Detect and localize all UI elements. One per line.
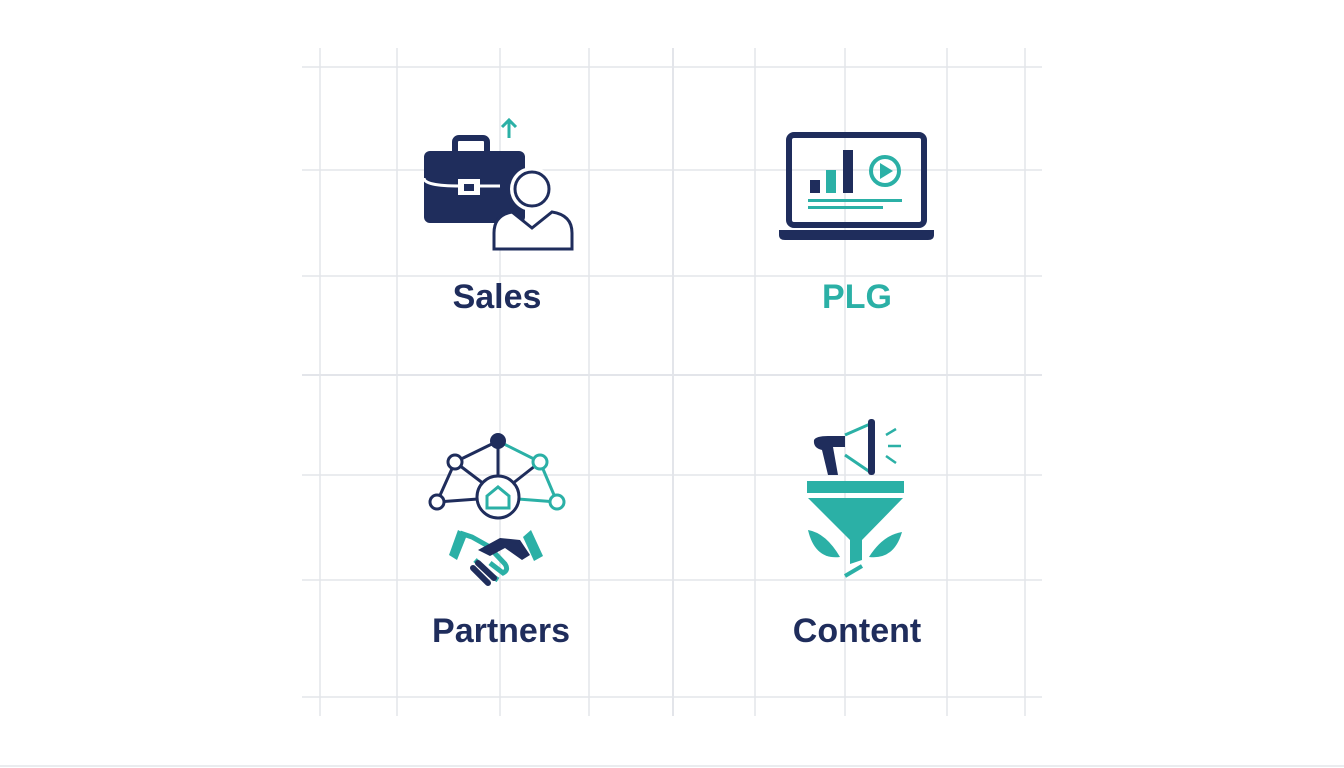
icon: partners network and handshake <box>430 433 564 583</box>
heading: Sales: Sales <box>453 278 541 316</box>
heading: Partners: Partners <box>432 612 570 650</box>
icon: sales briefcase with person <box>424 120 572 249</box>
heading: Content: Content <box>793 612 921 650</box>
heading: PLG: PLG <box>822 278 892 316</box>
icon: content megaphone funnel <box>807 419 904 576</box>
icon: PLG laptop <box>779 135 934 240</box>
